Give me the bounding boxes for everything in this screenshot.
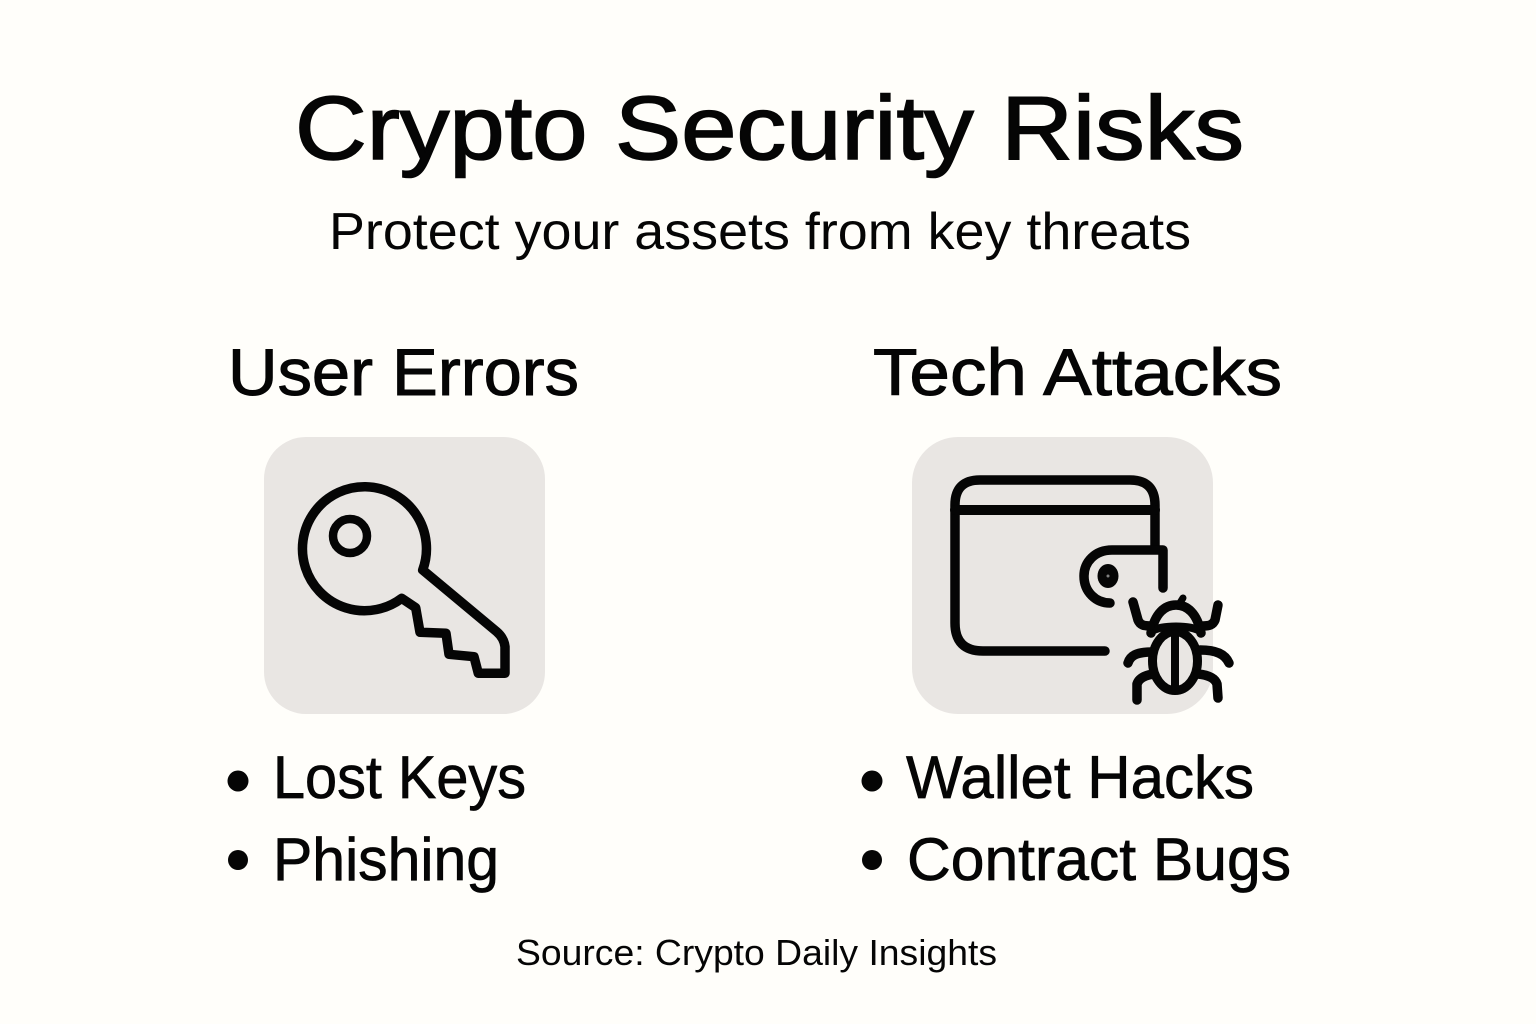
panel: user errors xyxy=(228,335,579,893)
bullet list: tech attacks: Wallet Hacks xyxy=(906,744,1254,811)
icon tile: wallet xyxy=(912,437,1213,714)
bullet list: user errors xyxy=(228,744,526,893)
subtitle: Protect your assets from key threats xyxy=(329,203,1191,261)
title: Crypto Security Risks xyxy=(295,79,1244,179)
bullet list: user errors: Lost Keys xyxy=(273,744,526,811)
heading: user errors: User Errors xyxy=(228,335,579,409)
heading: tech attacks: Tech Attacks xyxy=(873,335,1282,409)
bullet list: tech attacks: Contract Bugs xyxy=(907,826,1291,893)
icon: key xyxy=(302,487,505,673)
panel: tech attacks xyxy=(862,335,1291,893)
icon: wallet xyxy=(955,480,1163,651)
icon: bug xyxy=(1128,598,1229,700)
source note: Source: Crypto Daily Insights xyxy=(516,932,997,973)
bullet list: tech attacks xyxy=(862,744,1291,893)
icon tile: key xyxy=(264,437,545,714)
bullet list: user errors: Phishing xyxy=(273,826,499,893)
